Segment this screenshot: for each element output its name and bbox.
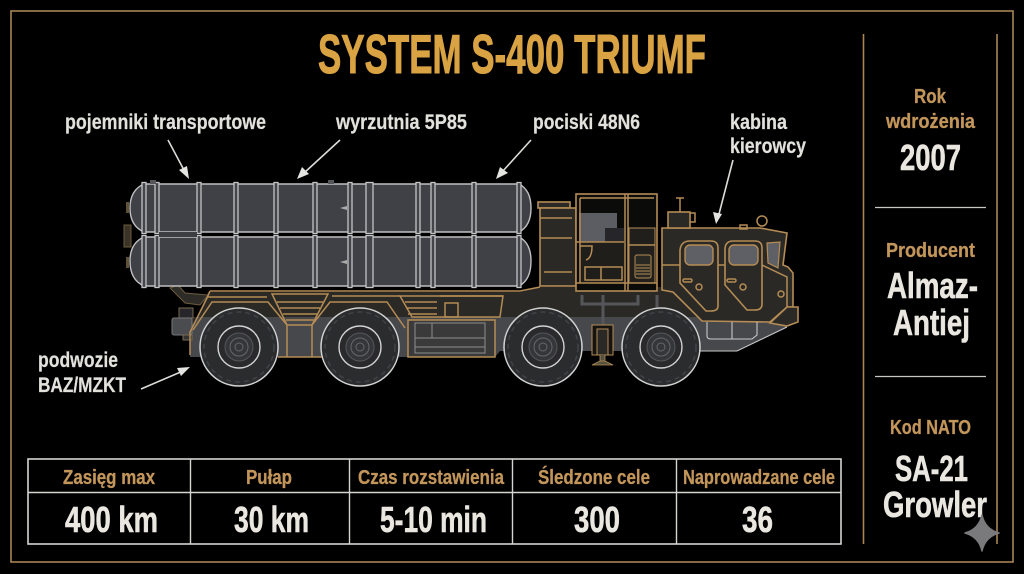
value: 36: 36: [742, 499, 773, 540]
missile container: top tube: [126, 180, 531, 234]
arrow: kabina: [713, 160, 733, 224]
wheel: [622, 308, 700, 386]
fact: Kod NATO: [883, 417, 987, 525]
cab: [662, 198, 798, 326]
fact: Rok wdrożenia: 2007: [900, 137, 961, 178]
rear mudguard and gear: [170, 285, 208, 340]
arrow: pojemniki: [168, 140, 189, 179]
header: Zasięg max: Zasięg max: [63, 467, 155, 489]
label: kabina kierowcy: kabina: [730, 111, 787, 134]
fact: Kod NATO: SA-21: [895, 448, 968, 489]
cab window: [685, 245, 713, 265]
label: pociski 48N6: pociski 48N6: [533, 111, 640, 134]
label: podwozie BAZ/MZKT: podwozie: [38, 349, 118, 372]
fact: Rok wdrożenia: [885, 86, 976, 178]
label: pojemniki transportowe: pojemniki transportowe: [65, 111, 266, 134]
label: podwozie BAZ/MZKT: [38, 349, 126, 397]
support jack: [592, 325, 613, 365]
under-cab box: [707, 322, 757, 339]
fact: Producent: Almaz-: [887, 265, 978, 306]
missile container: bottom tube: [124, 225, 531, 288]
fact: Rok wdrożenia: wdrożenia: [885, 111, 976, 133]
value: 5-10 min: 5-10 min: [380, 499, 487, 540]
cab fittings: [683, 216, 784, 297]
fact: Kod NATO: Kod NATO: [890, 417, 971, 439]
arrow: wyrzutnia: [297, 140, 340, 179]
wheel: [321, 308, 399, 386]
lower chassis band: [190, 317, 787, 357]
fact: Producent: Producent: [886, 240, 975, 262]
door: [680, 241, 718, 311]
title: SYSTEM S-400 TRIUMF: [318, 23, 706, 85]
stats table: [28, 459, 841, 544]
icon: sparkle watermark: [965, 515, 999, 551]
value: 400 km: 400 km: [65, 499, 158, 540]
chassis upper body: [190, 287, 702, 332]
arrow: podwozie: [141, 367, 190, 389]
label: wyrzutnia 5P85: wyrzutnia 5P85: [335, 111, 467, 134]
windshield: [767, 242, 780, 268]
bumper: [770, 307, 798, 326]
exhaust: [668, 198, 695, 228]
chassis frame lines: [190, 287, 540, 357]
equipment column: [538, 202, 576, 286]
arrow: pociski: [496, 140, 531, 179]
header: Naprowadzane cele: Naprowadzane cele: [683, 467, 835, 489]
header: Śledzone cele: Śledzone cele: [538, 465, 650, 489]
header: Czas rozstawienia: Czas rozstawienia: [358, 467, 505, 489]
sidebar: [864, 34, 997, 544]
value: 300: 300: [574, 499, 620, 540]
fact: Producent: Antiej: [893, 302, 970, 343]
header: Pułap: Pułap: [246, 467, 292, 489]
door: [725, 241, 762, 310]
illustration: launcher truck: [124, 180, 798, 386]
fact: Rok wdrożenia: Rok: [914, 86, 947, 108]
value: 30 km: 30 km: [234, 499, 309, 540]
fact: Kod NATO: Growler: [883, 484, 987, 525]
wheel: [504, 308, 582, 386]
hydraulic pipes: [582, 295, 657, 325]
equipment frame: [576, 194, 657, 291]
cab window: [729, 245, 758, 265]
wheel: [200, 308, 278, 386]
label: kabina kierowcy: [730, 111, 806, 158]
fact: Producent: [886, 240, 978, 343]
label: kabina kierowcy: kierowcy: [730, 135, 806, 158]
label: podwozie BAZ/MZKT: BAZ/MZKT: [38, 374, 126, 397]
